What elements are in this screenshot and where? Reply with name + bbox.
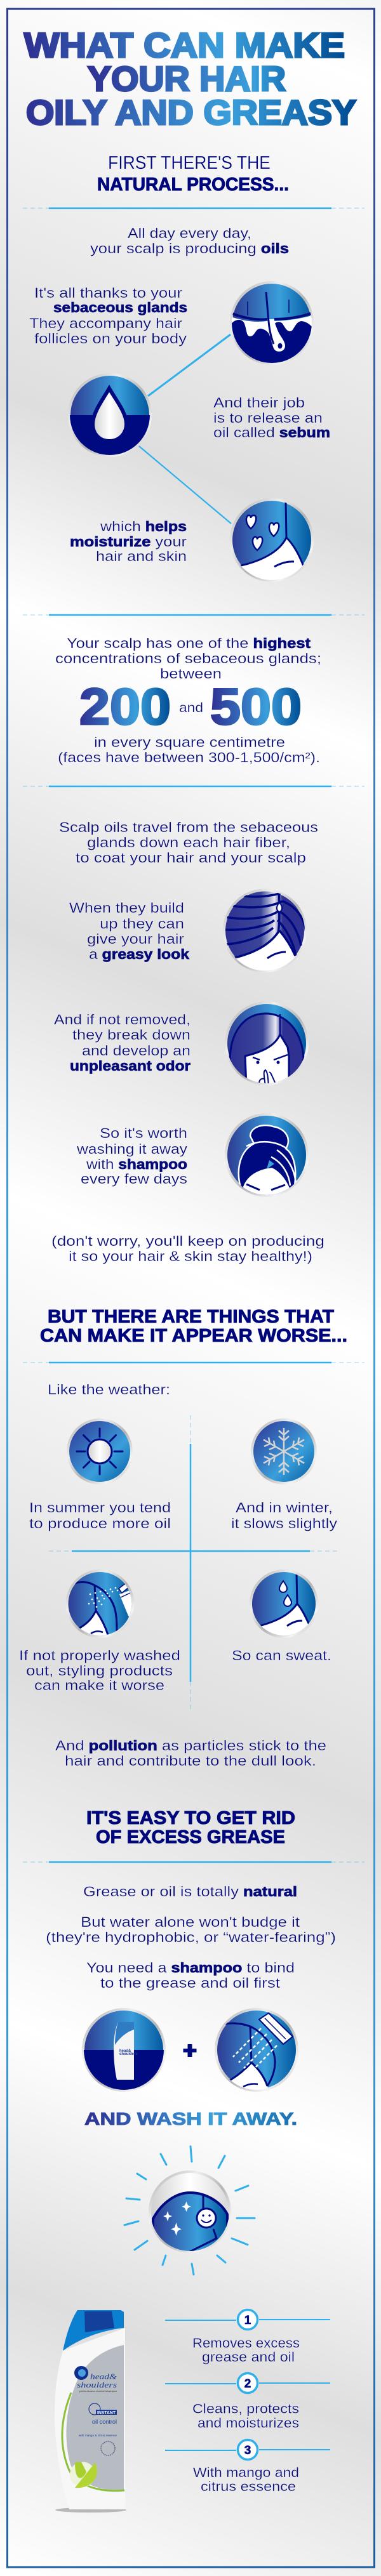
- text: winter: it slows slightly: [231, 1516, 337, 1531]
- icon: plus: [183, 2044, 197, 2057]
- text: shampoo: So it's worth: [100, 1125, 187, 1141]
- icon: snowflake: [252, 1420, 316, 1483]
- text: per centimetre: [58, 734, 320, 765]
- text: styling products: can make it worse: [34, 1677, 164, 1693]
- text: sebaceous glands: follicles on your body: [34, 331, 187, 347]
- product: shampoo bottle: with mango & citrus essence: [79, 2434, 117, 2437]
- text: scalp oils travel: glands down each hair fiber,: [87, 835, 290, 850]
- text: unpleasant odor: they break down: [72, 1027, 190, 1043]
- text: greasy look: When they build: [69, 900, 184, 916]
- heading: things that make it worse: [40, 1307, 347, 1346]
- text: sebaceous glands: [29, 285, 187, 347]
- stat: 200 and 500: 500: [210, 678, 302, 736]
- icon: oil drop: [67, 374, 153, 459]
- text: grease natural: You need a shampoo to bind: [86, 1960, 295, 1976]
- heading: things that make it worse: BUT THERE ARE THINGS THAT: [48, 1307, 334, 1327]
- text: pollution: hair and contribute to the dull look.: [65, 1753, 316, 1769]
- text: unpleasant odor: and develop an: [82, 1043, 190, 1059]
- text: grease natural: [46, 1884, 336, 1991]
- text: concentration: concentrations of sebaceous glands;: [55, 651, 321, 666]
- text: concentration: between: [160, 666, 222, 682]
- text: styling products: out, styling products: [26, 1663, 173, 1679]
- product: shampoo bottle: head&: [90, 2372, 117, 2381]
- benefit 1: [165, 2310, 330, 2365]
- text: unpleasant odor: And if not removed,: [54, 1012, 190, 1027]
- text: oils: [90, 225, 289, 256]
- text: sebum: is to release an: [213, 410, 323, 426]
- text: per centimetre: (faces have between 300-1,500/cm²).: [58, 750, 320, 765]
- heading: natural process: NATURAL PROCESS...: [97, 175, 289, 195]
- benefit 2: 2: [244, 2377, 251, 2391]
- text: grease natural: But water alone won't budge it: [81, 1914, 300, 1930]
- divider: [23, 1861, 364, 1863]
- product: shampoo bottle: INSTANT: [97, 2411, 116, 2415]
- benefit 1: grease and oil: [202, 2350, 295, 2365]
- text: pollution: And pollution as particles stick to the: [55, 1738, 326, 1754]
- title: [24, 25, 356, 132]
- benefit 3: With mango and: [193, 2466, 299, 2480]
- heading: easy to get rid: [86, 1808, 295, 1847]
- text: scalp oils travel: Scalp oils travel from the sebaceous: [59, 819, 318, 835]
- text: styling products: If not properly washed: [19, 1648, 180, 1663]
- benefit 2: [165, 2374, 330, 2431]
- text: sebaceous glands: They accompany hair: [29, 315, 182, 331]
- divider: [23, 208, 364, 209]
- text: don't worry: [51, 1233, 324, 1264]
- text: grease natural: Grease or oil is totally natural: [83, 1884, 297, 1899]
- text: concentration: [55, 635, 321, 682]
- text: moisturize: hair and skin: [96, 548, 187, 564]
- product: shampoo bottle: [55, 2310, 126, 2513]
- text: sebaceous glands: sebaceous glands: [53, 300, 187, 315]
- icon: sweat: [251, 1571, 317, 1641]
- icon: sun: [68, 1420, 131, 1483]
- text: sebaceous glands: It's all thanks to your: [34, 285, 182, 301]
- text: summer: to produce more oil: [29, 1516, 171, 1531]
- text: scalp oils travel: [59, 819, 318, 866]
- text: moisturize: which helps: [100, 519, 187, 534]
- heading: natural process: FIRST THERE'S THE: [108, 153, 271, 173]
- text: unpleasant odor: unpleasant odor: [70, 1058, 190, 1074]
- icon: towel: [226, 1114, 307, 1199]
- benefit 1: Removes excess: [192, 2336, 300, 2351]
- text: grease natural: to the grease and oil first: [100, 1975, 280, 1991]
- text: winter: [231, 1500, 337, 1531]
- benefit 3: [165, 2440, 330, 2494]
- text: unpleasant odor: [54, 1012, 190, 1074]
- icon: shower: [216, 2009, 297, 2094]
- text: greasy look: a greasy look: [89, 946, 190, 962]
- text: moisturize: [70, 519, 187, 564]
- stat: 200 and 500: 200: [79, 678, 171, 736]
- text: sweat: So can sweat.: [232, 1648, 331, 1663]
- stat: 200 and 500: and: [179, 701, 203, 715]
- text: moisturize: moisturize your: [70, 534, 187, 550]
- title: WHAT CAN MAKE: [24, 25, 345, 65]
- cross dividers: [49, 1415, 338, 1710]
- icon: happy hair with rays: [124, 2146, 255, 2275]
- benefit 1: 1: [244, 2314, 251, 2327]
- text: grease natural: (they're hydrophobic, or “water-fearing”): [46, 1929, 336, 1945]
- text: greasy look: up they can: [100, 916, 184, 932]
- divider: [23, 1362, 364, 1363]
- icon: greasy hair: [224, 888, 306, 977]
- benefit 3: citrus essence: [201, 2480, 296, 2494]
- product: shampoo bottle: shoulders: [77, 2380, 117, 2389]
- text: oils: your scalp is producing oils: [90, 241, 289, 256]
- text: don't worry: (don't worry, you'll keep on producing: [51, 1233, 324, 1249]
- text: shampoo: with shampoo: [86, 1156, 187, 1172]
- text: summer: [29, 1500, 171, 1531]
- text: greasy look: give your hair: [87, 931, 184, 947]
- divider: [23, 786, 364, 787]
- heading: and wash it away: AND WASH IT AWAY.: [84, 2109, 297, 2129]
- text: oils: All day every day,: [128, 225, 251, 241]
- text: pollution: [55, 1738, 326, 1769]
- icon: styling spray: [67, 1571, 137, 1644]
- stat: 200 and 500: [79, 678, 302, 736]
- product: shampoo bottle: oil control: [92, 2419, 117, 2425]
- icon: shampoo bottle: head&: [119, 2049, 131, 2053]
- benefit 3: 3: [244, 2444, 251, 2457]
- text: sebum: oil called sebum: [213, 425, 330, 440]
- text: per centimetre: in every square centimetre: [94, 734, 285, 750]
- title: YOUR HAIR: [88, 59, 286, 98]
- title: OILY AND GREASY: [26, 93, 356, 132]
- text: summer: In summer you tend: [29, 1500, 171, 1516]
- heading: easy to get rid: OF EXCESS GREASE: [96, 1827, 285, 1847]
- benefit 2: and moisturizes: [197, 2416, 299, 2431]
- text: concentration: Your scalp has one of the highest: [67, 635, 311, 651]
- text: scalp oils travel: to coat your hair and your scalp: [76, 850, 306, 866]
- text: greasy look: [69, 900, 190, 962]
- icon: hair follicle: [229, 282, 314, 368]
- text: styling products: [19, 1648, 180, 1693]
- divider: [23, 614, 364, 616]
- text: don't worry: it so your hair & skin stay healthy!): [69, 1248, 312, 1264]
- icon: shampoo bottle: shoulders: [119, 2052, 138, 2056]
- text: winter: And in winter,: [236, 1500, 333, 1516]
- connector lines: [139, 334, 231, 524]
- text: like the weather: Like the weather:: [48, 1382, 170, 1397]
- icon: hearts on head: [231, 499, 312, 584]
- heading: easy to get rid: IT'S EASY TO GET RID: [86, 1808, 295, 1828]
- text: sebum: [213, 395, 330, 440]
- text: sebum: And their job: [213, 395, 305, 411]
- heading: natural process: [97, 153, 289, 195]
- icon: odor: [226, 1003, 307, 1087]
- text: shampoo: [76, 1125, 187, 1187]
- product: shampoo bottle: performance control shampoo: [79, 2389, 117, 2393]
- text: shampoo: washing it away: [76, 1141, 187, 1157]
- icon: shampoo bottle: [79, 2009, 168, 2094]
- text: shampoo: every few days: [81, 1171, 187, 1187]
- benefit 2: Cleans, protects: [192, 2401, 299, 2417]
- heading: things that make it worse: CAN MAKE IT APPEAR WORSE...: [40, 1326, 347, 1346]
